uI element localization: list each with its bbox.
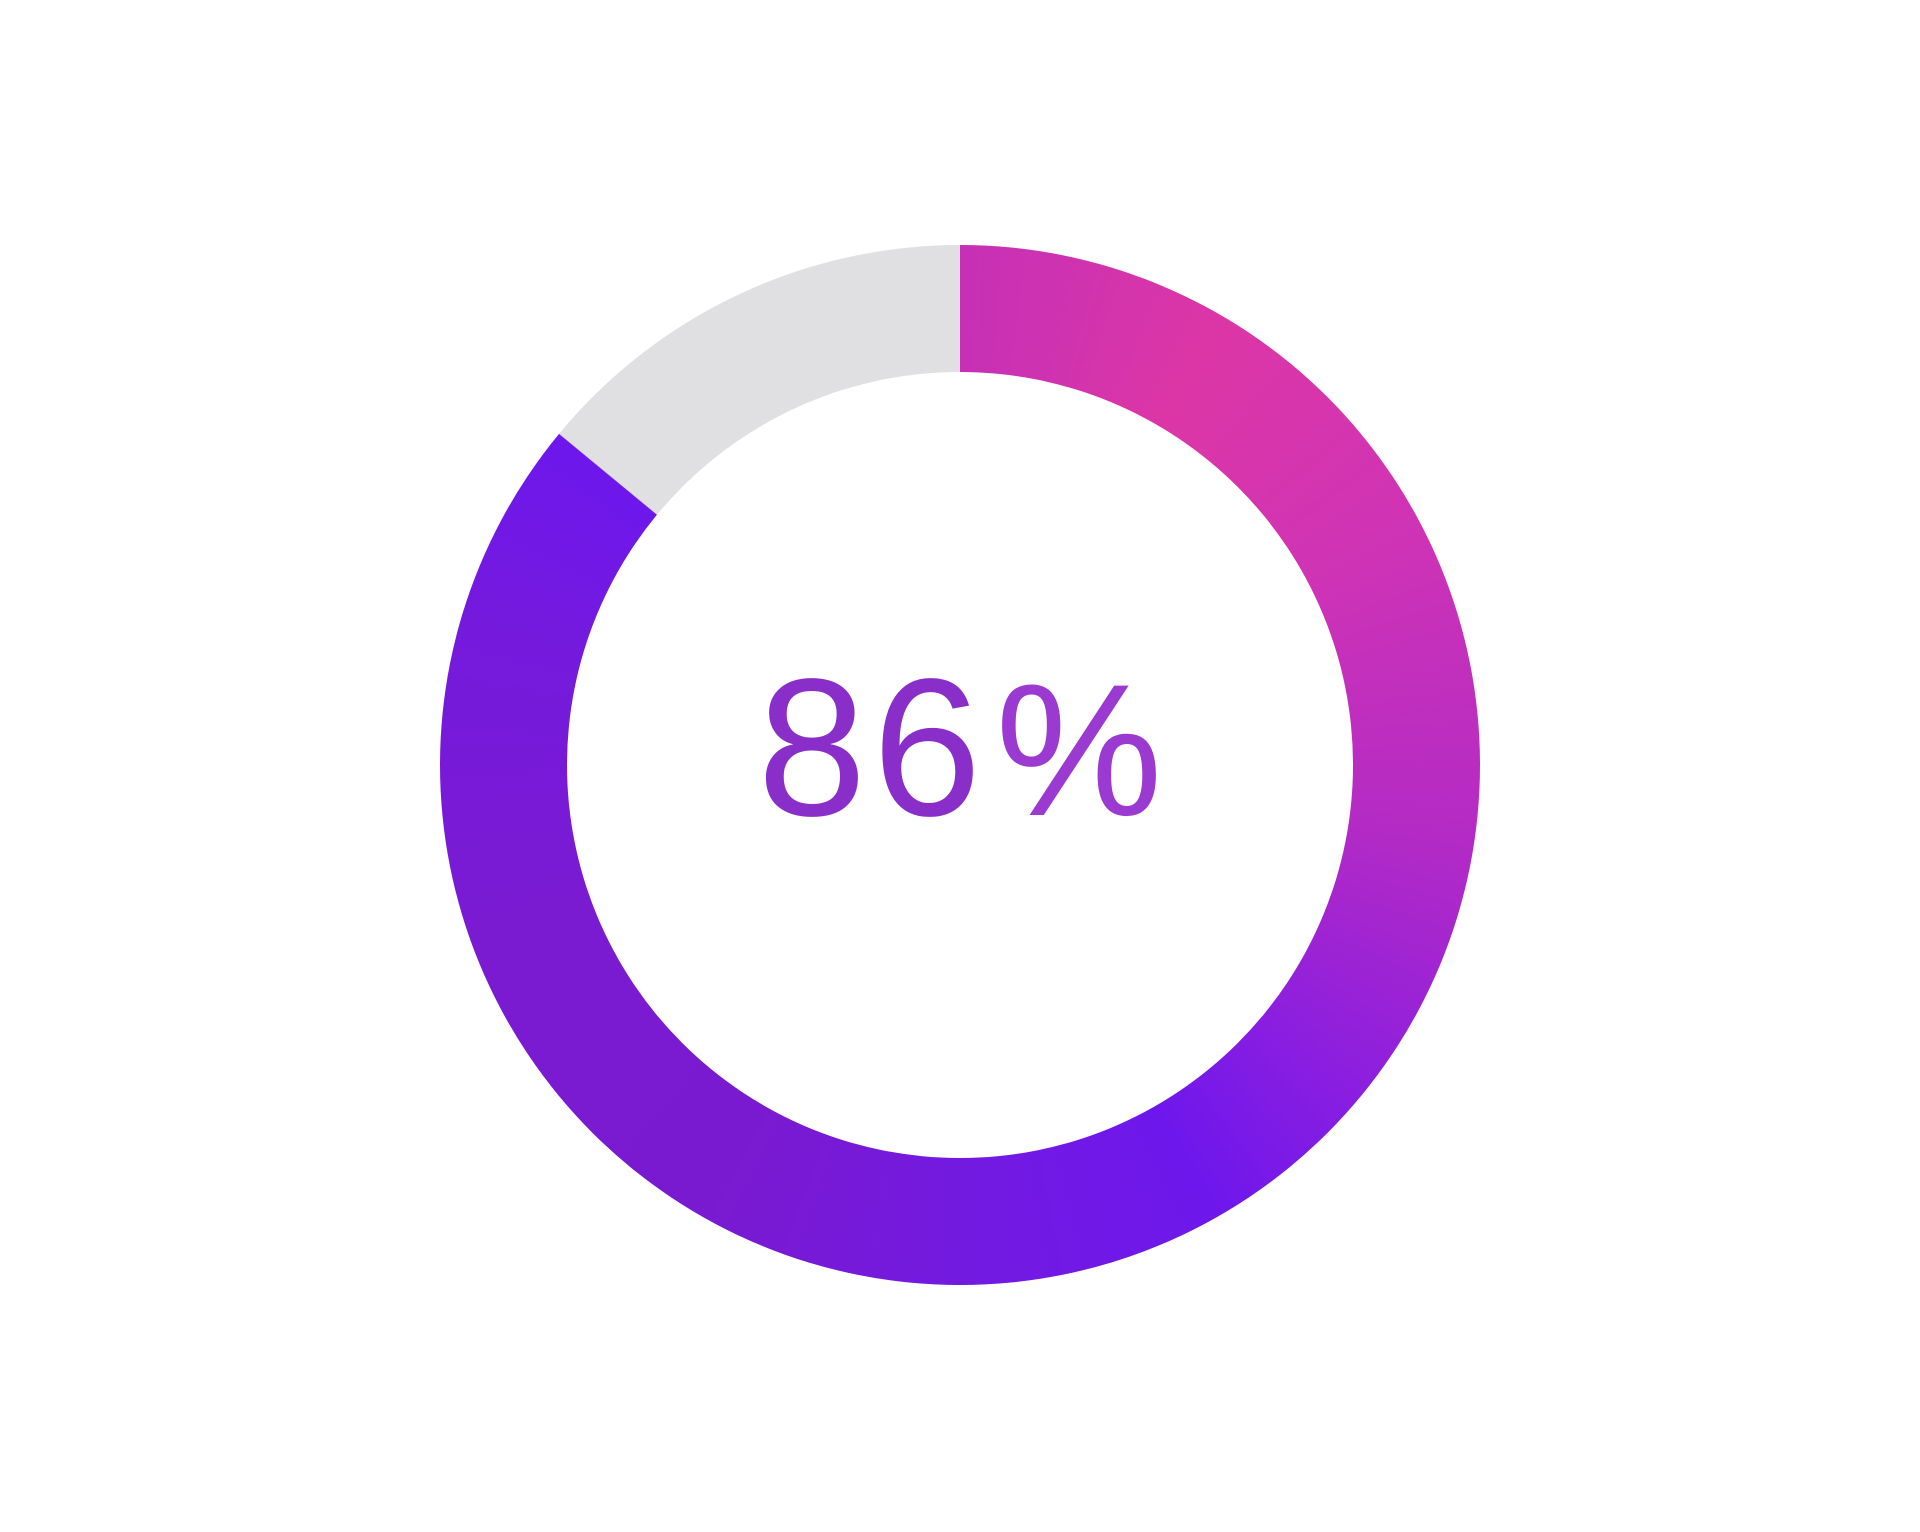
percentage label: 86% — [757, 638, 1163, 857]
donut chart: 86% — [440, 245, 1480, 1285]
donut inner hole — [567, 372, 1353, 1158]
